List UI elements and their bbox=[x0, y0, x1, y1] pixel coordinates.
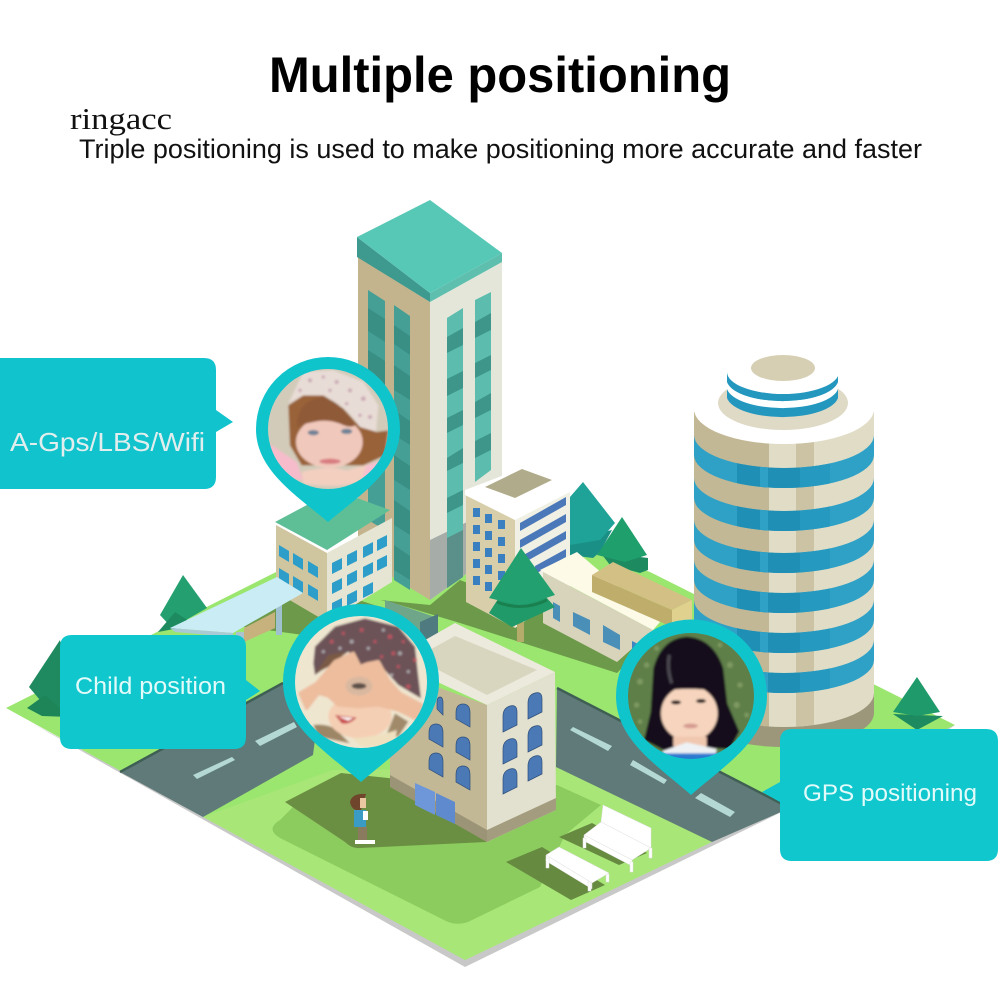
tree behind mid-rise bbox=[570, 482, 615, 558]
road edges bbox=[120, 683, 790, 808]
tree right edge bbox=[893, 677, 943, 730]
title: Multiple positioning bbox=[269, 47, 731, 103]
callout: Child position: Child position bbox=[75, 673, 226, 700]
road right bbox=[556, 688, 790, 842]
bus shelter bbox=[170, 577, 303, 652]
long low building bbox=[540, 552, 692, 662]
benches bbox=[546, 805, 652, 891]
front apartment building bbox=[390, 623, 556, 842]
road markings bbox=[193, 722, 735, 817]
low green-roof building bbox=[275, 490, 392, 622]
brand label: ringacc bbox=[70, 101, 172, 136]
subtitle: Triple positioning is used to make positioning more accurate and faster bbox=[79, 134, 922, 164]
child figure bbox=[350, 794, 375, 844]
isometric ground bbox=[6, 540, 955, 967]
cylindrical tower bbox=[694, 350, 874, 760]
location pin: child making heart with hands bbox=[283, 604, 439, 782]
small block behind pin bbox=[385, 600, 438, 640]
callout: A-Gps/LBS/Wifi: A-Gps/LBS/Wifi bbox=[10, 427, 205, 457]
tree far left bbox=[27, 640, 75, 717]
callout: A-Gps/LBS/Wifi bbox=[0, 358, 233, 489]
big tree bbox=[489, 548, 555, 642]
tall tower bbox=[357, 200, 502, 600]
callout: GPS positioning: GPS positioning bbox=[803, 780, 977, 807]
tree beside low block bbox=[597, 517, 648, 573]
callout: Child position bbox=[60, 635, 260, 749]
mid-rise building bbox=[465, 468, 570, 628]
tree back left bbox=[158, 575, 207, 632]
callout: GPS positioning bbox=[762, 729, 998, 861]
road left bbox=[120, 683, 320, 817]
location pin: girl with black hair bbox=[616, 619, 767, 795]
location pin: girl in patterned hat bbox=[256, 357, 400, 522]
